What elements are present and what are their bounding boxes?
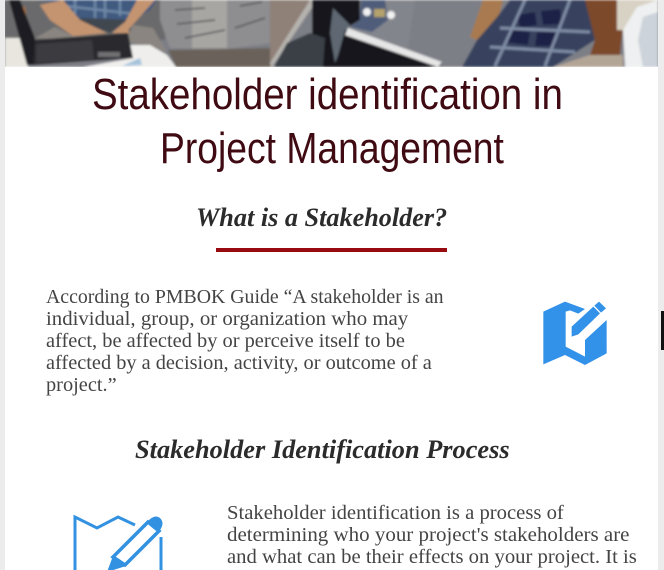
definition text: individual, group, or organization who may (46, 308, 408, 330)
definition text: project.” (46, 374, 117, 396)
process text: Stakeholder identification is a process of (227, 502, 564, 524)
header photo (5, 0, 658, 67)
title (92, 70, 563, 173)
icon: solid map with pencil (543, 302, 607, 365)
process text (227, 502, 637, 568)
icon: outline map with pencil (74, 514, 162, 570)
definition text: affected by a decision, activity, or outcome of a (46, 352, 432, 374)
process text: and what can be their effects on your project. It is (227, 546, 637, 568)
process text: determining who your project's stakeholders are (227, 524, 629, 546)
heading: what is a stakeholder: What is a Stakeholder? (196, 203, 447, 232)
heading: identification process: Stakeholder Identification Process (135, 435, 510, 464)
definition text: According to PMBOK Guide “A stakeholder is an (46, 286, 444, 308)
title: Stakeholder identification in (92, 70, 563, 119)
definition text (46, 286, 444, 396)
red divider (216, 248, 447, 252)
black edge mark (661, 311, 664, 350)
title: Project Management (160, 124, 504, 173)
definition text: affect, be affected by or perceive itself to be (46, 330, 405, 352)
